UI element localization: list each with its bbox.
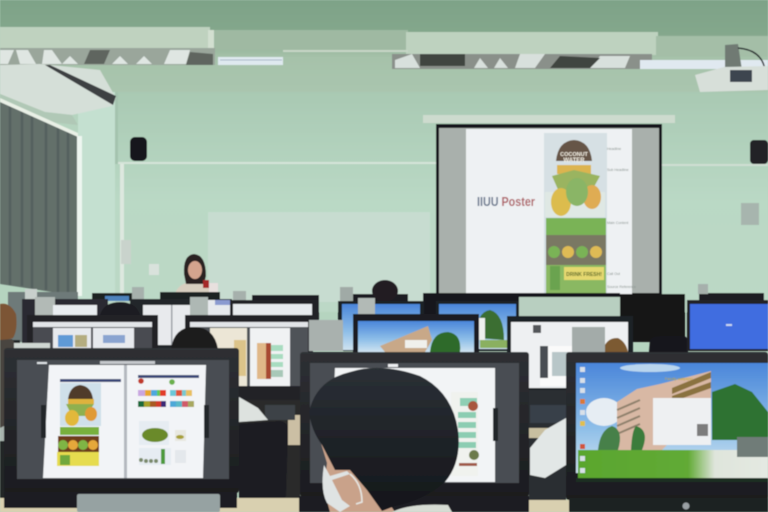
student arm in white shirt [530, 418, 566, 478]
presenter [175, 254, 218, 294]
office chair [649, 336, 688, 352]
projector [695, 44, 768, 92]
projection screen [423, 115, 675, 297]
back row of monitors [8, 280, 764, 342]
white dialog [653, 398, 711, 445]
left wall speaker [130, 137, 147, 161]
whiteboard [208, 212, 430, 302]
air conditioner [0, 64, 116, 125]
slide annotations: Call Out [607, 272, 620, 276]
trees [712, 384, 768, 440]
right page: colour swatches and food images [138, 375, 199, 465]
desktop icons [580, 367, 585, 473]
slide title: IIUU Poster [477, 195, 535, 209]
lower desk area behind front row [0, 340, 566, 512]
page nav arrows [41, 405, 46, 438]
slide poster: coconut water: DRINK FRESH! [566, 272, 602, 278]
monitor with poster pages, left [27, 315, 158, 350]
third row of monitors [27, 302, 633, 397]
right wall speaker [750, 140, 768, 164]
monitor with poster pages, centre [185, 315, 313, 397]
paper divider [572, 327, 605, 353]
presentation slide [466, 129, 636, 294]
HP logo [682, 502, 690, 510]
seated student at left edge [0, 304, 50, 428]
room ceiling [0, 0, 768, 96]
curtain [0, 98, 82, 296]
monitor with web page, right [507, 316, 633, 390]
head of student in back row [372, 280, 398, 302]
slide annotations: Main Content [607, 221, 628, 225]
lawn [578, 450, 768, 480]
second row of monitors [22, 294, 768, 352]
monitor with campus wallpaper [338, 298, 424, 351]
shirt of student behind left monitor [239, 397, 268, 422]
campus text overlay: Faculty wallpaper [665, 377, 694, 381]
monitor with campus wallpaper, centre [353, 314, 479, 352]
front monitor right, campus wallpaper [566, 352, 768, 512]
monitor with campus wallpaper [436, 301, 519, 351]
head of student, left [100, 302, 140, 315]
paper stand below left monitor [77, 494, 220, 512]
front monitor centre, showing poster guide [299, 352, 529, 512]
toolbar [100, 361, 155, 364]
people on wallpaper [737, 437, 768, 457]
slide annotations: Sub Headline [607, 168, 629, 172]
campus building [617, 371, 711, 450]
head of student, centre [171, 327, 218, 349]
slide poster: coconut water [544, 133, 607, 294]
black chair back [239, 421, 288, 505]
front student head and mask [309, 368, 459, 512]
dark monitor [620, 294, 685, 342]
webcam and power button [118, 495, 124, 501]
left page: poster thumbnail [57, 379, 121, 466]
slide poster: coconut water: COCONUT [560, 152, 589, 158]
slide annotations [607, 147, 636, 289]
clouds [586, 398, 622, 426]
desk surface [0, 498, 569, 512]
front monitor left, showing poster guide [4, 348, 239, 508]
slide poster: coconut water: WATER [563, 158, 585, 164]
paper divider [309, 320, 343, 351]
blue screen monitor [687, 300, 768, 351]
ceiling beams and light fixtures [0, 27, 768, 69]
back wall [78, 92, 768, 312]
slide annotations: Source Reference [607, 285, 636, 289]
slide annotations: Headline [607, 147, 621, 151]
